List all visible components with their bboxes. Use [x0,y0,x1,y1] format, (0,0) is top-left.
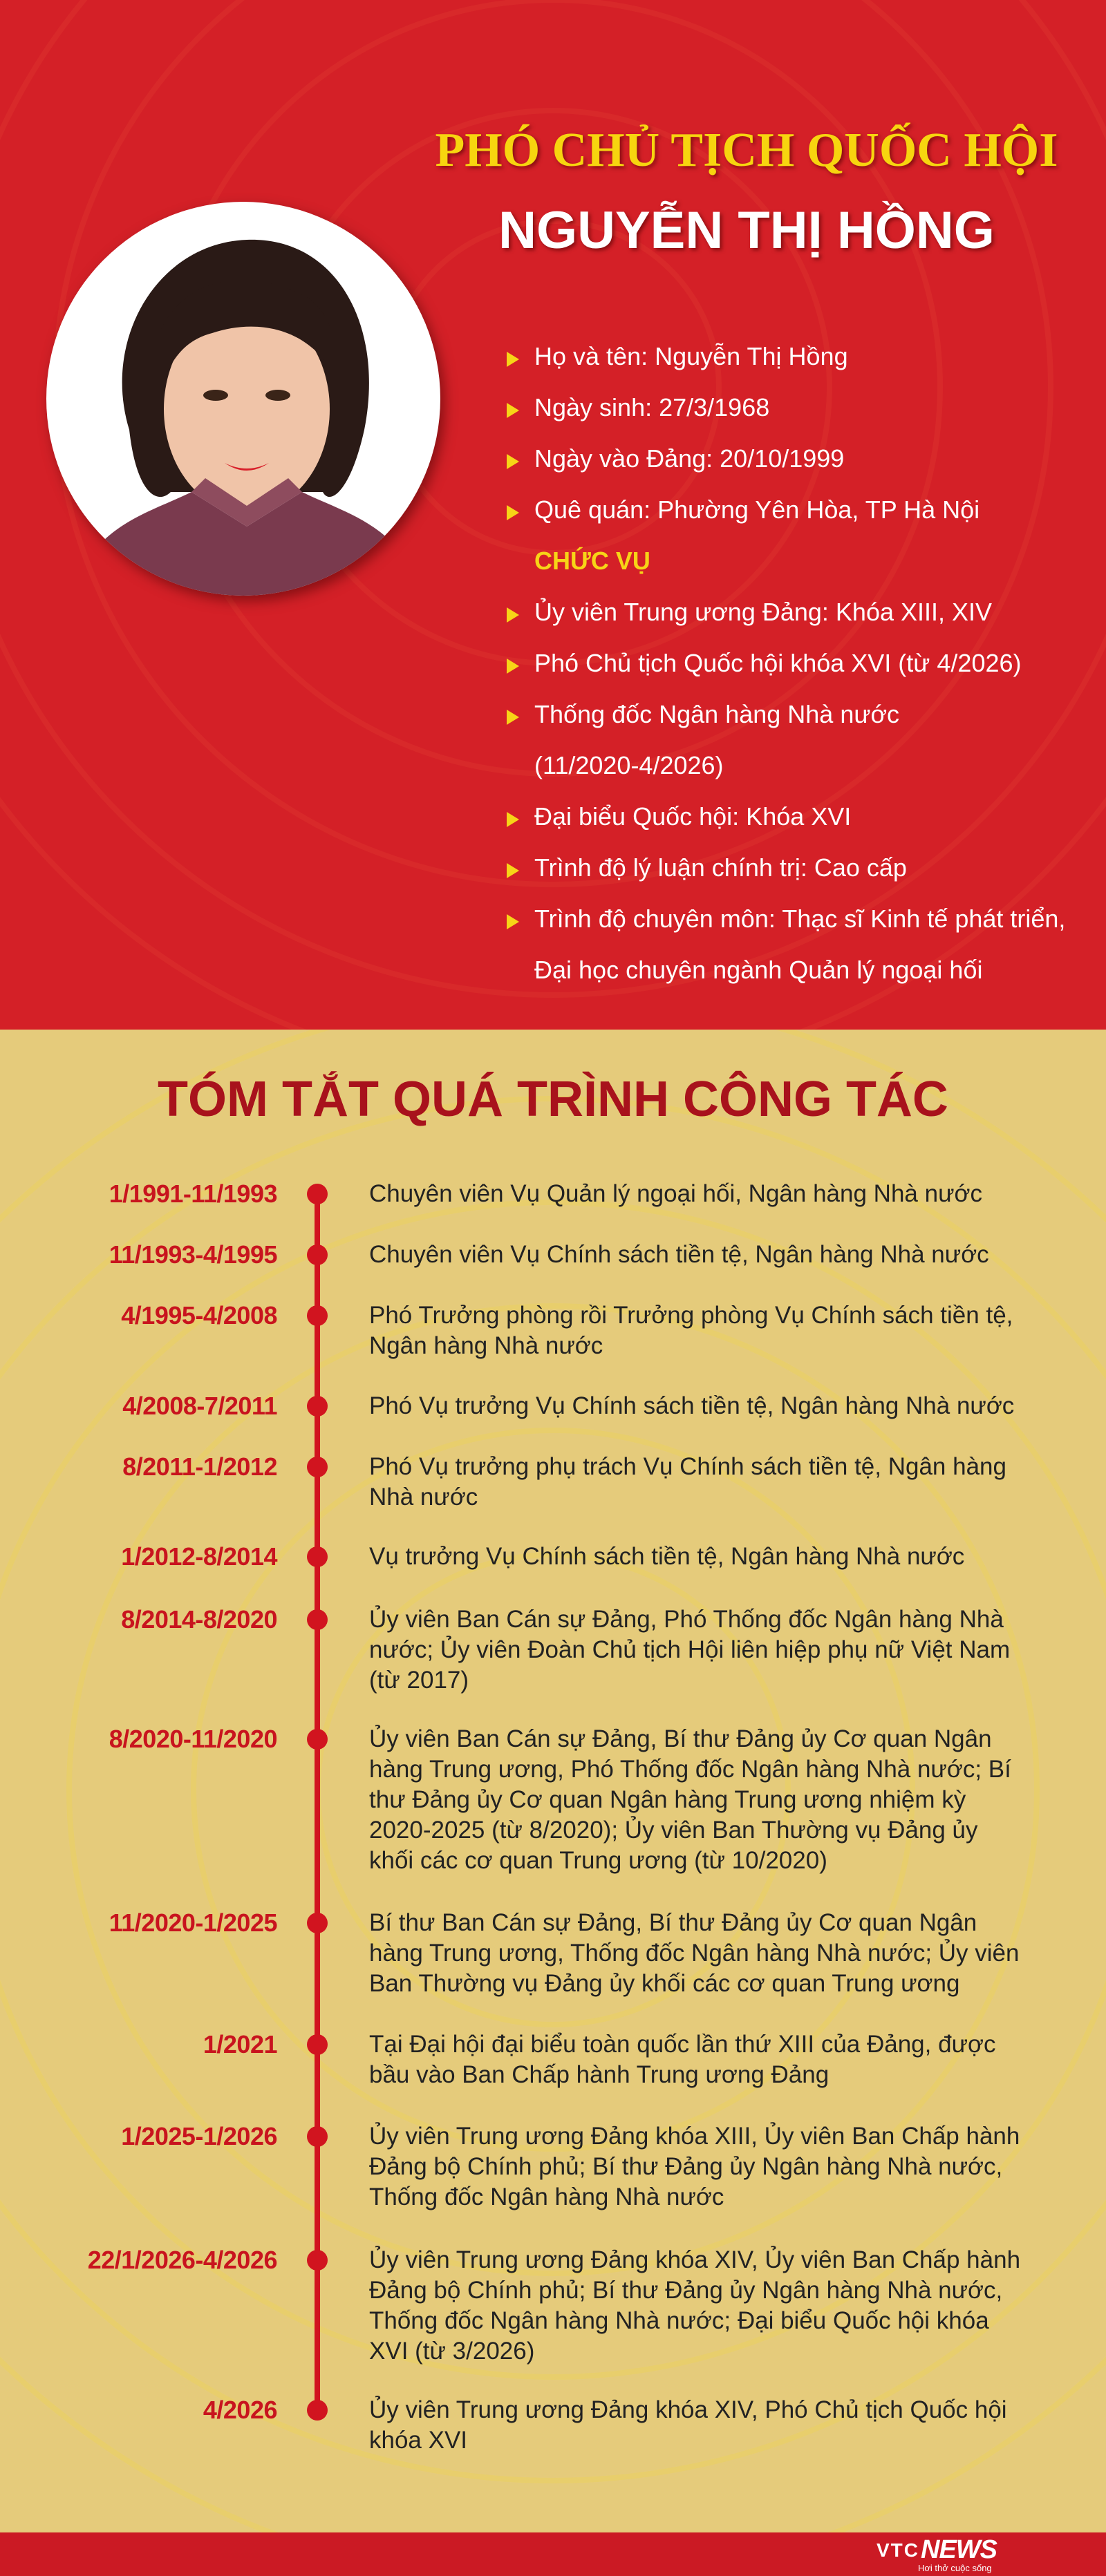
bullet: education: Trình độ chuyên môn: Thạc sĩ Kinh tế phát triển, [534,905,1065,933]
timeline item 7: 8/2014-8/2020 [121,1605,277,1633]
timeline item 9: Bí thư Ban Cán sự Đảng, Bí thư Đảng ủy Cơ quan Ngân [369,1909,977,1936]
timeline item 13 [203,2396,1007,2454]
timeline item 3: Phó Trưởng phòng rồi Trưởng phòng Vụ Chính sách tiền tệ, [369,1302,1013,1329]
timeline item 2: 11/1993-4/1995 [109,1240,277,1269]
text: Nhà nước [369,1484,478,1510]
timeline item 2 [109,1240,989,1269]
timeline item 7 [121,1605,1010,1694]
timeline [315,1204,320,2400]
text: position 3 continued: (11/2020-4/2026) [534,751,724,779]
bullet: position 1: Ủy viên Trung ương Đảng: Khóa XIII, XIV [534,598,992,626]
timeline item 3 [121,1301,1013,1359]
heading: timeline: TÓM TẮT QUÁ TRÌNH CÔNG TÁC [158,1072,948,1127]
title: PHÓ CHỦ TỊCH QUỐC HỘI [435,124,1058,177]
timeline item 12: Ủy viên Trung ương Đảng khóa XIV, Ủy viên Ban Chấp hành [369,2246,1020,2273]
text: (từ 2017) [369,1667,469,1694]
timeline item 12 [88,2246,1020,2365]
info list [507,342,1065,984]
panel: header red background [0,0,1106,1030]
logo: VTC News: VTC [877,2539,919,2561]
timeline item 1 [109,1180,982,1208]
text: khối các cơ quan Trung ương (từ 10/2020) [369,1847,827,1874]
timeline item 4: Phó Vụ trưởng Vụ Chính sách tiền tệ, Ngân hàng Nhà nước [369,1392,1014,1419]
timeline item 8 [109,1725,1011,1874]
timeline item 10: Tại Đại hội đại biểu toàn quốc lần thứ XIII của Đảng, được [369,2031,995,2058]
bullet: political theory: Trình độ lý luận chính trị: Cao cấp [534,853,907,882]
timeline item 1: 1/1991-11/1993 [109,1180,277,1208]
logo: VTC News: NEWS [921,2535,997,2564]
timeline item 5 [122,1452,1006,1510]
text: thư Đảng ủy Cơ quan Ngân hàng Trung ương nhiệm kỳ [369,1786,966,1813]
logo: VTC News: Hơi thở cuộc sống [918,2563,992,2573]
portrait photo [46,202,440,596]
timeline item 11: 1/2025-1/2026 [121,2122,277,2150]
timeline item 9: 11/2020-1/2025 [109,1909,277,1937]
timeline item 4 [122,1392,1014,1420]
timeline item 11: Ủy viên Trung ương Đảng khóa XIII, Ủy viên Ban Chấp hành [369,2123,1020,2150]
bullet: hometown: Quê quán: Phường Yên Hòa, TP Hà Nội [534,495,980,524]
timeline item 3: 4/1995-4/2008 [121,1301,277,1329]
timeline item 4: 4/2008-7/2011 [122,1392,277,1420]
text: Thống đốc Ngân hàng Nhà nước [369,2184,724,2210]
timeline item 8: 8/2020-11/2020 [109,1725,277,1753]
name heading: NGUYỄN THỊ HỒNG [498,201,995,260]
timeline item 9 [109,1909,1019,1997]
text: education continued: Đại học chuyên ngành Quản lý ngoại hối [534,956,982,984]
timeline item 6: 1/2012-8/2014 [121,1542,277,1571]
timeline item 11 [121,2122,1020,2210]
timeline item 1: Chuyên viên Vụ Quản lý ngoại hối, Ngân hàng Nhà nước [369,1180,982,1207]
text: bầu vào Ban Chấp hành Trung ương Đảng [369,2061,829,2088]
logo: VTC News [877,2535,997,2573]
timeline item 6 [121,1542,964,1571]
text: hàng Trung ương, Thống đốc Ngân hàng Nhà nước; Ủy viên [369,1940,1019,1967]
text: Ban Thường vụ Đảng ủy khối các cơ quan Trung ương [369,1970,959,1997]
text: Đảng bộ Chính phủ; Bí thư Đảng ủy Ngân hàng Nhà nước, [369,2153,1002,2180]
timeline item 5: Phó Vụ trưởng phụ trách Vụ Chính sách tiền tệ, Ngân hàng [369,1453,1006,1480]
text: nước; Ủy viên Đoàn Chủ tịch Hội liên hiệp phụ nữ Việt Nam [369,1636,1010,1663]
text: Ngân hàng Nhà nước [369,1332,603,1359]
text: Thống đốc Ngân hàng Nhà nước; Đại biểu Quốc hội khóa [369,2307,989,2334]
bullet: party: Ngày vào Đảng: 20/10/1999 [534,444,844,473]
timeline item 8: Ủy viên Ban Cán sự Đảng, Bí thư Đảng ủy Cơ quan Ngân [369,1725,992,1752]
timeline item 7: Ủy viên Ban Cán sự Đảng, Phó Thống đốc Ngân hàng Nhà [369,1606,1004,1633]
text: Đảng bộ Chính phủ; Bí thư Đảng ủy Ngân hàng Nhà nước, [369,2277,1002,2304]
bullet: position 3: Thống đốc Ngân hàng Nhà nước [534,700,899,728]
timeline item 13: Ủy viên Trung ương Đảng khóa XIV, Phó Chủ tịch Quốc hội [369,2396,1007,2423]
panel: career timeline background [0,1030,1106,2532]
text: hàng Trung ương, Phó Thống đốc Ngân hàng Nhà nước; Bí [369,1756,1011,1783]
text: 2020-2025 (từ 8/2020); Ủy viên Ban Thường vụ Đảng ủy [369,1817,978,1844]
timeline item 10: 1/2021 [203,2030,277,2058]
bullet: deputy: Đại biểu Quốc hội: Khóa XVI [534,802,851,831]
timeline item 5: 8/2011-1/2012 [122,1452,277,1481]
bullet: name: Họ và tên: Nguyễn Thị Hồng [534,342,848,370]
bullet: position 2: Phó Chủ tịch Quốc hội khóa XVI (từ 4/2026) [534,649,1022,677]
timeline item 2: Chuyên viên Vụ Chính sách tiền tệ, Ngân hàng Nhà nước [369,1241,989,1268]
timeline item 6: Vụ trưởng Vụ Chính sách tiền tệ, Ngân hàng Nhà nước [369,1543,964,1570]
timeline item 13: 4/2026 [203,2396,277,2424]
bullet: birth: Ngày sinh: 27/3/1968 [534,393,769,422]
timeline item 12: 22/1/2026-4/2026 [88,2246,277,2274]
timeline item 10 [203,2030,995,2088]
footer bar [0,2532,1106,2576]
text: XVI (từ 3/2026) [369,2338,534,2365]
text: khóa XVI [369,2427,467,2454]
subheading: chuc vu: CHỨC VỤ [534,547,650,575]
